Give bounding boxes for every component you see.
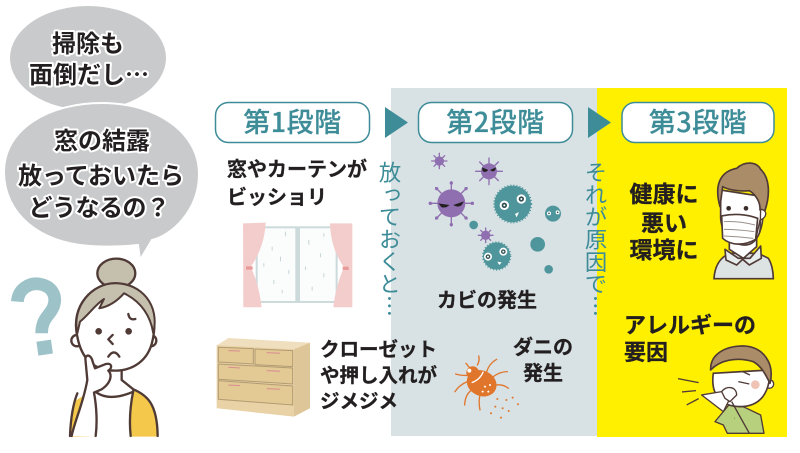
text: mite growth: ダニの [513,331,573,360]
text: bad for health: 悪い [641,204,687,238]
text: allergy cause: 要因 [624,335,668,367]
panel: stage 2 background [391,88,597,436]
text: window and curtains wet: ビッショリ [227,181,327,210]
arrow: stage 2 to 3 [588,107,611,138]
illustration: man wearing mask [714,163,773,279]
text: bad for health: 健康に [630,175,698,209]
illustration: thinking woman [69,259,158,437]
speech bubble: condensation question: どうなるの？ [28,188,170,223]
speech bubble: cleaning: 面倒だし… [29,55,149,90]
text: closet damp [320,333,438,414]
text: bad for health: 環境に [630,231,698,265]
speech bubble: cleaning: 掃除も [52,24,124,59]
text: window and curtains wet: 窓やカーテンが [227,153,367,182]
text: closet damp: クローゼット [320,333,437,362]
speech bubble: condensation question [4,103,199,260]
panel: stage 3 background [597,88,787,437]
text: allergy cause [624,308,756,367]
text: allergy cause: アレルギーの [624,308,756,340]
stage 3 heading [622,101,774,142]
speech bubble: cleaning [10,6,166,110]
stage 2 heading [418,101,572,142]
speech bubble: condensation question: 放っておいたら [18,156,184,191]
illustration: sneezing boy [678,346,774,433]
text: mold growth: カビの発生 [437,284,537,313]
arrow: stage 1 to 2 [385,107,408,138]
vertical text: if left alone: 放っておくと… [374,161,406,317]
stage 3 heading: 第3段階 [649,101,747,140]
illustration: dust mite [455,356,519,419]
speech bubble: condensation question: 窓の結露 [54,121,150,156]
stage 1 heading: 第1段階 [243,101,342,140]
vertical text: as a result: それが原因で… [580,161,612,317]
text: mite growth: 発生 [523,357,563,386]
text: mite growth [513,331,573,386]
text: closet damp: ジメジメ [320,385,398,414]
stage 2 heading: 第2段階 [446,101,545,140]
text: bad for health [630,175,698,265]
icon: question mark [17,284,55,356]
text: closet damp: や押し入れが [320,359,438,388]
illustration: mold and germs [429,153,561,274]
illustration: wooden chest of drawers [217,338,310,417]
text: window and curtains wet [227,153,367,210]
illustration: wet window with curtains [243,223,352,307]
stage 1 heading [216,101,370,142]
